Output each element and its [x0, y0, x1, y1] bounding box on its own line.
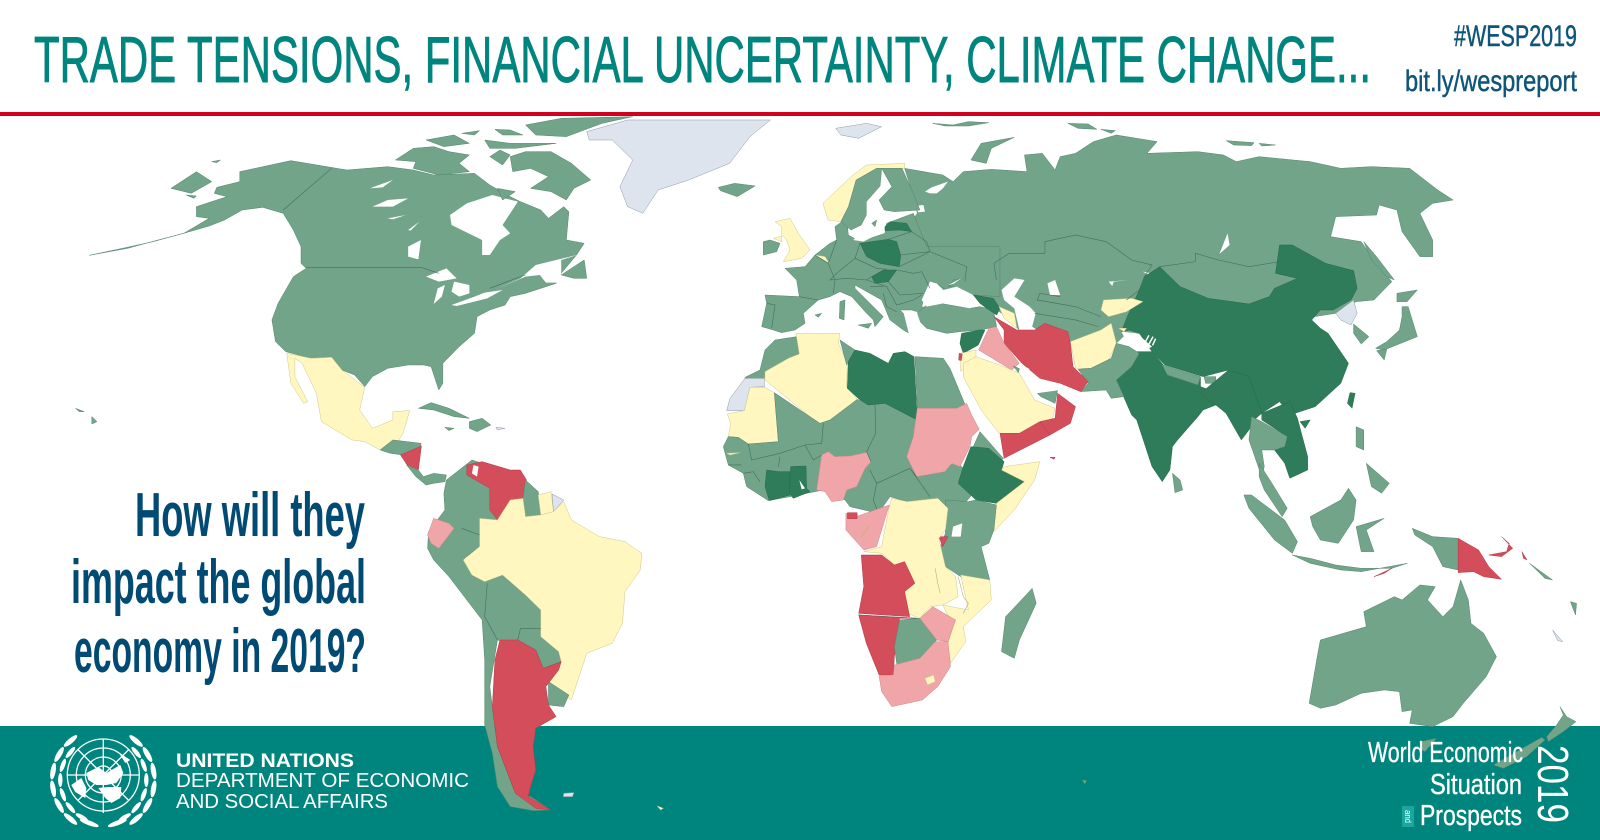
question heading — [71, 481, 366, 686]
organisation name: UNITED NATIONS — [176, 751, 354, 772]
report logotype: and — [1403, 810, 1413, 823]
North and West Africa — [723, 333, 1003, 513]
organisation name: DEPARTMENT OF ECONOMIC — [176, 770, 469, 792]
Eurasia base land — [836, 122, 1453, 343]
map region: North America and Greenland — [76, 117, 770, 470]
icon: United Nations emblem — [49, 734, 158, 829]
world map — [76, 117, 1577, 811]
header rule — [0, 112, 1600, 116]
report logotype: World Economic — [1368, 737, 1523, 769]
Asia countries — [823, 163, 1417, 493]
map region: New Zealand and Tasmania — [1420, 707, 1576, 768]
organisation name — [176, 751, 469, 813]
report logotype: Prospects — [1420, 800, 1522, 832]
report logotype: 2019 — [1528, 745, 1577, 823]
Europe — [762, 187, 1000, 353]
report logotype: Situation — [1430, 769, 1522, 801]
map region: South America — [407, 460, 663, 811]
footer band — [0, 726, 1600, 840]
map region: Southeast Asia and Oceania — [1082, 463, 1577, 784]
map region: Africa — [723, 333, 1040, 707]
question heading: How will they — [135, 481, 365, 550]
question heading: impact the global — [71, 548, 366, 617]
report logotype — [1368, 737, 1577, 832]
question heading: economy in 2019? — [74, 617, 366, 686]
map region: Eurasia — [762, 122, 1453, 493]
organisation name: AND SOCIAL AFFAIRS — [176, 791, 388, 813]
Central, East and Southern Africa — [846, 447, 1040, 707]
